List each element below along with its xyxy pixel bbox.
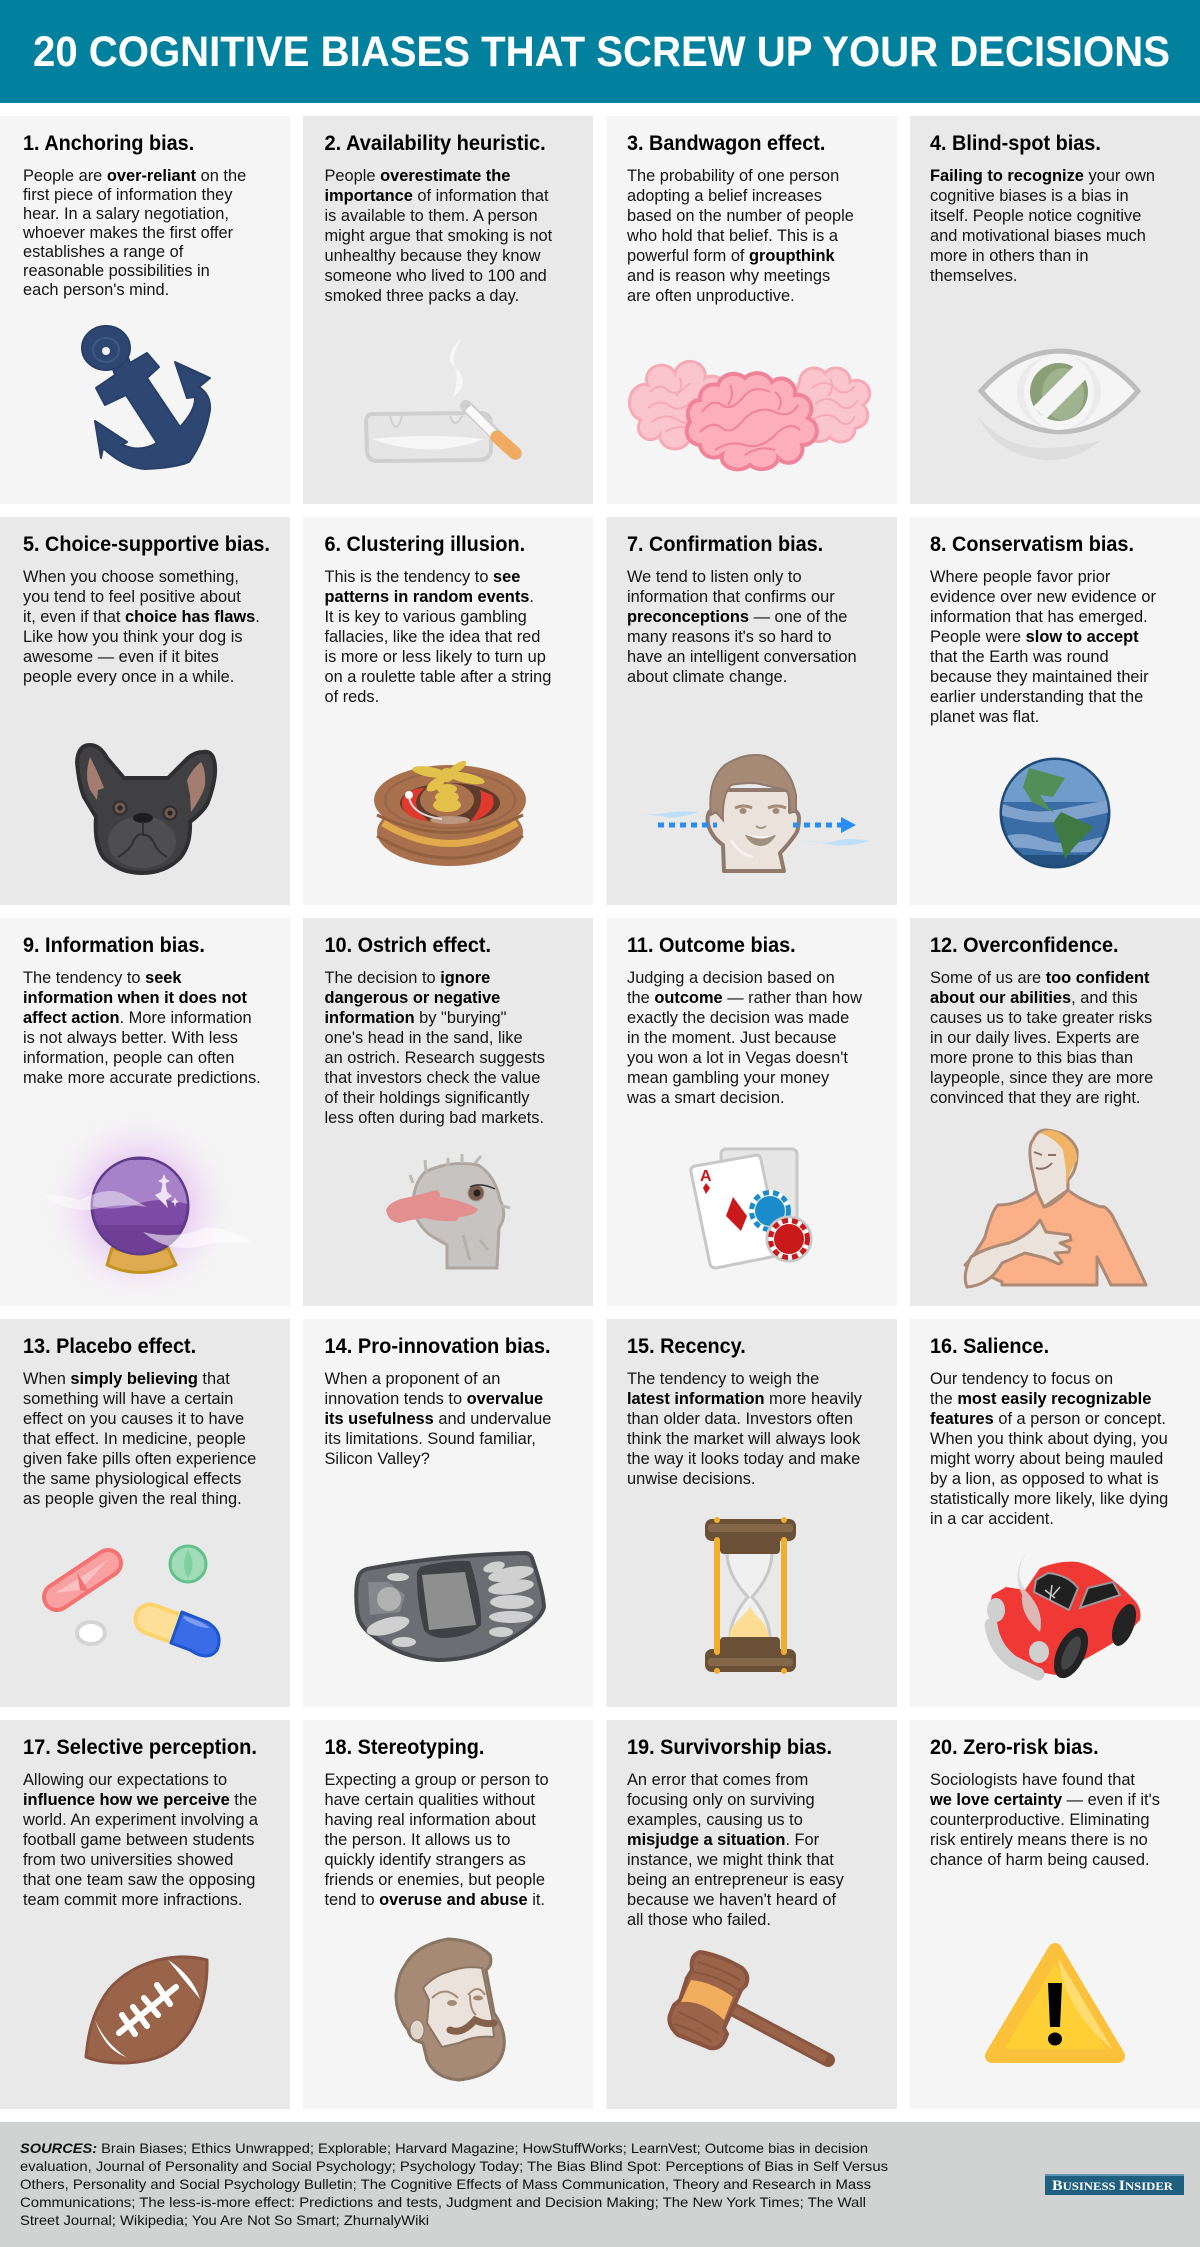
text block: stereotyping: have certain qualities without (324, 1790, 535, 1809)
text block: confirmation bias: We tend to listen only to (627, 567, 802, 586)
text block: clustering illusion: This is the tendency to see (324, 567, 520, 586)
text block: zero-risk bias: chance of harm being caused. (930, 1850, 1150, 1869)
sources text: Communications; The less-is-more effect: Predictions and tests, Judgment and Decision Making; The New York Times; The Wall (20, 2194, 866, 2210)
text block: overconfidence: about our abilities, and this (930, 988, 1138, 1007)
text block: outcome bias: Judging a decision based on (627, 968, 835, 987)
icon: anchor (82, 326, 210, 469)
text block: bandwagon effect: adopting a belief increases (627, 186, 822, 205)
text block: anchoring bias: establishes a range of (23, 242, 184, 261)
panel: 16 salience (910, 1319, 1200, 1707)
text block: stereotyping: Expecting a group or person to (324, 1770, 549, 1789)
icon: gavel (669, 1952, 828, 2060)
text block: selective perception: Allowing our expectations to (23, 1770, 227, 1789)
sources text: evaluation, Journal of Personality and Social Psychology; Psychology Today; The Bias Blind Spot: Perceptions of Bias in Self Versus (20, 2158, 888, 2174)
icon: confident man (965, 1130, 1146, 1287)
text block: ostrich effect: dangerous or negative (324, 988, 500, 1007)
text block: salience: in a car accident. (930, 1509, 1054, 1528)
sources text: SOURCES: Brain Biases; Ethics Unwrapped; Explorable; Harvard Magazine; HowStuffWorks; LearnVest; Outcome bias in decision (20, 2140, 868, 2156)
heading: information bias: 9. Information bias. (23, 935, 205, 957)
text block: information bias: information, people can often (23, 1048, 234, 1067)
logo: business insider: BUSINESS INSIDER (1052, 2178, 1173, 2194)
text block: confirmation bias: have an intelligent conversation (627, 647, 857, 666)
text block: conservatism bias: information that has emerged. (930, 607, 1148, 626)
text block: overconfidence: Some of us are too confident (930, 968, 1149, 987)
text block: bandwagon effect: and is reason why meetings (627, 266, 830, 285)
text block: anchoring bias: People are over-reliant on the (23, 166, 246, 185)
text block: recency: The tendency to weigh the (627, 1369, 819, 1388)
icon: smartphone n-gage (356, 1553, 544, 1660)
icon: three brains (630, 361, 870, 469)
panel: 13 placebo effect (0, 1319, 290, 1707)
text block: clustering illusion: of reds. (324, 687, 379, 706)
text block: pro-innovation bias: its usefulness and undervalue (324, 1409, 551, 1428)
text block: stereotyping: friends or enemies, but people (324, 1870, 545, 1889)
icon: playing cards and chips: A (700, 1168, 712, 1185)
icon: warning triangle (992, 1950, 1118, 2056)
heading: blind-spot bias: 4. Blind-spot bias. (930, 133, 1101, 155)
text block: stereotyping: having real information about (324, 1810, 536, 1829)
text block: recency: than older data. Investors often (627, 1409, 853, 1428)
heading: zero-risk bias: 20. Zero-risk bias. (930, 1737, 1099, 1759)
arrow through head (658, 817, 856, 833)
text block: ostrich effect: an ostrich. Research suggests (324, 1048, 545, 1067)
text block: overconfidence: in our daily lives. Experts are (930, 1028, 1139, 1047)
text block: choice-supportive bias: When you choose something, (23, 567, 239, 586)
text block: confirmation bias: information that confirms our (627, 587, 835, 606)
heading: bandwagon effect: 3. Bandwagon effect. (627, 133, 825, 155)
heading: placebo effect: 13. Placebo effect. (23, 1336, 196, 1358)
text block: conservatism bias: earlier understanding that the (930, 687, 1143, 706)
text block: ostrich effect: of their holdings significantly (324, 1088, 530, 1107)
text block: recency: think the market will always look (627, 1429, 861, 1448)
text block: stereotyping: quickly identify strangers as (324, 1850, 526, 1869)
panel: 11 outcome bias (606, 918, 897, 1306)
text block: blind-spot bias: and motivational biases much (930, 226, 1146, 245)
icon: crystal ball (64, 1131, 216, 1284)
icon: eye with slashed iris (977, 351, 1138, 460)
text block: pro-innovation bias: When a proponent of an (324, 1369, 500, 1388)
icon: earth globe (1000, 759, 1110, 870)
text block: availability heuristic: is available to them. A person (324, 206, 538, 225)
text block: information bias: make more accurate predictions. (23, 1068, 261, 1087)
icon: pills (55, 1546, 219, 1656)
text block: information bias: information when it does not (23, 988, 247, 1007)
text block: selective perception: from two universities showed (23, 1850, 233, 1869)
panel: 14 pro-innovation bias (303, 1319, 593, 1707)
text block: salience: Our tendency to focus on (930, 1369, 1113, 1388)
text block: placebo effect: effect on you causes it to have (23, 1409, 244, 1428)
icon: football (86, 1957, 207, 2063)
text block: overconfidence: convinced that they are right. (930, 1088, 1140, 1107)
heading: anchoring bias: 1. Anchoring bias. (23, 133, 194, 155)
panel: 2 availability heuristic (303, 116, 593, 504)
text block: anchoring bias: whoever makes the first offer (22, 223, 234, 242)
text block: overconfidence: causes us to take greater risks (930, 1008, 1152, 1027)
text block: selective perception: football game between students (23, 1830, 254, 1849)
text block: ostrich effect: less often during bad markets. (324, 1108, 544, 1127)
text block: stereotyping: tend to overuse and abuse it. (324, 1890, 545, 1909)
text block: placebo effect: When simply believing that (23, 1369, 230, 1388)
text block: availability heuristic: importance of information that (324, 186, 549, 205)
text block: bandwagon effect: powerful form of groupthink (627, 246, 835, 265)
sources text: Street Journal; Wikipedia; You Are Not So Smart; ZhurnalyWiki (20, 2212, 429, 2228)
text block: information bias: is not always better. With less (23, 1028, 238, 1047)
text block: selective perception: influence how we perceive the (23, 1790, 257, 1809)
heading: availability heuristic: 2. Availability heuristic. (324, 132, 546, 155)
panel: 7 confirmation bias (606, 517, 897, 905)
text block: clustering illusion: on a roulette table after a string (324, 667, 551, 686)
text block: selective perception: world. An experiment involving a (22, 1810, 259, 1829)
text block: choice-supportive bias: people every once in a while. (23, 667, 234, 686)
text block: availability heuristic: smoked three packs a day. (324, 286, 519, 305)
text block: survivorship bias: focusing only on surviving (627, 1790, 815, 1809)
text block: bandwagon effect: The probability of one person (627, 166, 839, 185)
text block: ostrich effect: that investors check the value (324, 1068, 540, 1087)
text block: choice-supportive bias: awesome — even if it bites (23, 647, 219, 666)
heading: survivorship bias: 19. Survivorship bias. (627, 1737, 832, 1759)
footer: sources (0, 2122, 1200, 2247)
icon: playing cards and chips (691, 1149, 811, 1268)
panel: 17 selective perception (0, 1720, 290, 2109)
text block: conservatism bias: planet was flat. (930, 707, 1039, 726)
text block: outcome bias: was a smart decision. (626, 1088, 785, 1107)
text block: survivorship bias: instance, we might think that (627, 1850, 834, 1869)
text block: zero-risk bias: risk entirely means there is no (930, 1830, 1148, 1849)
text block: recency: unwise decisions. (627, 1469, 755, 1488)
panel: 9 information bias (0, 918, 290, 1306)
text block: zero-risk bias: Sociologists have found that (930, 1770, 1135, 1789)
text block: salience: When you think about dying, you (930, 1429, 1168, 1448)
logo: business insider (1045, 2174, 1184, 2195)
text block: ostrich effect: one's head in the sand, like (324, 1028, 523, 1047)
heading: conservatism bias: 8. Conservatism bias. (930, 534, 1134, 556)
text block: clustering illusion: It is key to various gambling (324, 607, 527, 626)
text block: survivorship bias: examples, causing us to (627, 1810, 803, 1829)
panel: 19 survivorship bias (606, 1720, 897, 2109)
panel: 10 ostrich effect (303, 918, 593, 1306)
heading: recency: 15. Recency. (627, 1336, 746, 1358)
text block: outcome bias: mean gambling your money (627, 1068, 830, 1087)
icon: hourglass (705, 1517, 796, 1674)
text block: outcome bias: you won a lot in Vegas doesn't (627, 1048, 848, 1067)
panel: 18 stereotyping (303, 1720, 593, 2109)
sources text: Others, Personality and Social Psychology Bulletin; The Cognitive Effects of Mass Communication, Theory and Research in Mass (20, 2176, 871, 2192)
text block: overconfidence: laypeople, since they are more (930, 1068, 1153, 1087)
text block: confirmation bias: preconceptions — one of the (627, 607, 847, 626)
icon: roulette wheel (374, 758, 526, 866)
text block: placebo effect: something will have a certain (23, 1389, 233, 1408)
text block: pro-innovation bias: Silicon Valley? (324, 1449, 430, 1468)
panel: 6 clustering illusion (303, 517, 593, 905)
icon: ashtray and cigarette (366, 337, 516, 461)
text block: clustering illusion: fallacies, like the idea that red (324, 627, 540, 646)
text block: bandwagon effect: based on the number of people (627, 206, 854, 225)
sources text (20, 2140, 888, 2228)
text block: bandwagon effect: who hold that belief. This is a (626, 226, 839, 245)
heading: outcome bias: 11. Outcome bias. (627, 935, 796, 957)
panel: 1 anchoring bias (0, 116, 290, 504)
text block: survivorship bias: misjudge a situation. For (627, 1830, 819, 1849)
text block: blind-spot bias: Failing to recognize your own (930, 166, 1155, 185)
heading: overconfidence: 12. Overconfidence. (930, 935, 1119, 957)
text block: salience: the most easily recognizable (930, 1389, 1151, 1408)
text block: ostrich effect: information by "burying" (324, 1008, 506, 1027)
panel: 3 bandwagon effect (606, 116, 897, 504)
text block: blind-spot bias: themselves. (930, 266, 1017, 285)
text block: salience: might worry about being mauled (930, 1449, 1163, 1468)
text block: anchoring bias: each person's mind. (23, 280, 169, 299)
heading: clustering illusion: 6. Clustering illusion. (324, 534, 525, 556)
text block: survivorship bias: An error that comes from (627, 1770, 808, 1789)
text block: pro-innovation bias: its limitations. Sound familiar, (324, 1429, 536, 1448)
red chip (767, 1217, 811, 1261)
panel: 15 recency (606, 1319, 897, 1707)
text block: availability heuristic: People overestimate the (324, 166, 510, 185)
text block: confirmation bias: about climate change. (627, 667, 787, 686)
text block: availability heuristic: someone who lived to 100 and (324, 266, 547, 285)
panel: 12 overconfidence (910, 918, 1200, 1306)
text block: blind-spot bias: more in others than in (930, 246, 1089, 265)
text block: conservatism bias: People were slow to accept (930, 627, 1139, 646)
text block: choice-supportive bias: it, even if that choice has flaws. (23, 607, 260, 626)
heading: stereotyping: 18. Stereotyping. (324, 1737, 484, 1759)
icon: french bulldog head (77, 745, 215, 873)
text block: salience: by a lion, as opposed to what is (930, 1469, 1159, 1488)
text block: zero-risk bias: counterproductive. Eliminating (930, 1810, 1150, 1829)
text block: placebo effect: that effect. In medicine, people (23, 1429, 246, 1448)
text block: outcome bias: in the moment. Just because (627, 1028, 837, 1047)
panel: 5 choice-supportive bias (0, 517, 290, 905)
text block: outcome bias: the outcome — rather than how (627, 988, 862, 1007)
text block: salience: statistically more likely, like dying (930, 1489, 1168, 1508)
text block: survivorship bias: all those who failed. (627, 1910, 771, 1929)
panel: 8 conservatism bias (910, 517, 1200, 905)
text block: confirmation bias: many reasons it's so hard to (627, 627, 831, 646)
text block: information bias: affect action. More information (23, 1008, 252, 1027)
text block: information bias: The tendency to seek (23, 968, 182, 987)
text block: availability heuristic: unhealthy because they know (324, 246, 541, 265)
text block: bandwagon effect: are often unproductive. (627, 286, 795, 305)
header banner (0, 0, 1200, 103)
text block: anchoring bias: reasonable possibilities in (23, 261, 210, 280)
text block: conservatism bias: that the Earth was round (930, 647, 1109, 666)
text block: zero-risk bias: we love certainty — even if it's (930, 1790, 1160, 1809)
text block: conservatism bias: Where people favor prior (930, 567, 1111, 586)
text block: survivorship bias: because we haven't heard of (627, 1890, 836, 1909)
text block: salience: features of a person or concept. (930, 1409, 1166, 1428)
text block: stereotyping: the person. It allows us to (324, 1830, 510, 1849)
icon: bearded man (396, 1939, 504, 2080)
icon: crashed red car (987, 1550, 1141, 1683)
text block: selective perception: team commit more infractions. (23, 1890, 242, 1909)
text block: pro-innovation bias: innovation tends to overvalue (324, 1389, 543, 1408)
heading: pro-innovation bias: 14. Pro-innovation bias. (324, 1335, 551, 1358)
text block: anchoring bias: first piece of information they (23, 185, 233, 204)
text block: clustering illusion: is more or less likely to turn up (324, 647, 546, 666)
text block: availability heuristic: might argue that smoking is not (324, 226, 553, 245)
text block: clustering illusion: patterns in random events. (324, 587, 534, 606)
text block: anchoring bias: hear. In a salary negotiation, (23, 204, 229, 223)
text block: recency: the way it looks today and make (627, 1449, 860, 1468)
text block: ostrich effect: The decision to ignore (324, 968, 490, 987)
text block: choice-supportive bias: you tend to feel positive about (23, 587, 241, 606)
text block: outcome bias: exactly the decision was made (627, 1008, 849, 1027)
blue chip (749, 1190, 791, 1232)
panel: 20 zero-risk bias (910, 1720, 1200, 2109)
text block: blind-spot bias: itself. People notice cognitive (930, 206, 1141, 225)
text block: selective perception: that one team saw the opposing (23, 1870, 255, 1889)
text block: choice-supportive bias: Like how you think your dog is (23, 627, 243, 646)
heading: ostrich effect: 10. Ostrich effect. (324, 935, 491, 957)
text block: recency: latest information more heavily (627, 1389, 862, 1408)
text block: placebo effect: as people given the real thing. (23, 1489, 242, 1508)
panel: 4 blind-spot bias (910, 116, 1200, 504)
icon: ostrich head (386, 1154, 510, 1268)
text block: overconfidence: more prone to this bias than (930, 1048, 1133, 1067)
text block: survivorship bias: being an entrepreneur is easy (627, 1870, 844, 1889)
heading: salience: 16. Salience. (930, 1336, 1049, 1358)
text block: placebo effect: given fake pills often experience (23, 1449, 256, 1468)
heading: selective perception: 17. Selective perception. (23, 1736, 257, 1759)
icon: head with arrow passing through (632, 755, 869, 871)
heading: choice-supportive bias: 5. Choice-supportive bias. (23, 534, 270, 556)
text block: conservatism bias: because they maintained their (930, 667, 1149, 686)
heading: confirmation bias: 7. Confirmation bias. (627, 534, 823, 556)
text block: conservatism bias: evidence over new evidence or (930, 587, 1156, 606)
text block: placebo effect: the same physiological effects (23, 1469, 241, 1488)
text block: blind-spot bias: cognitive biases is a bias in (930, 186, 1129, 205)
